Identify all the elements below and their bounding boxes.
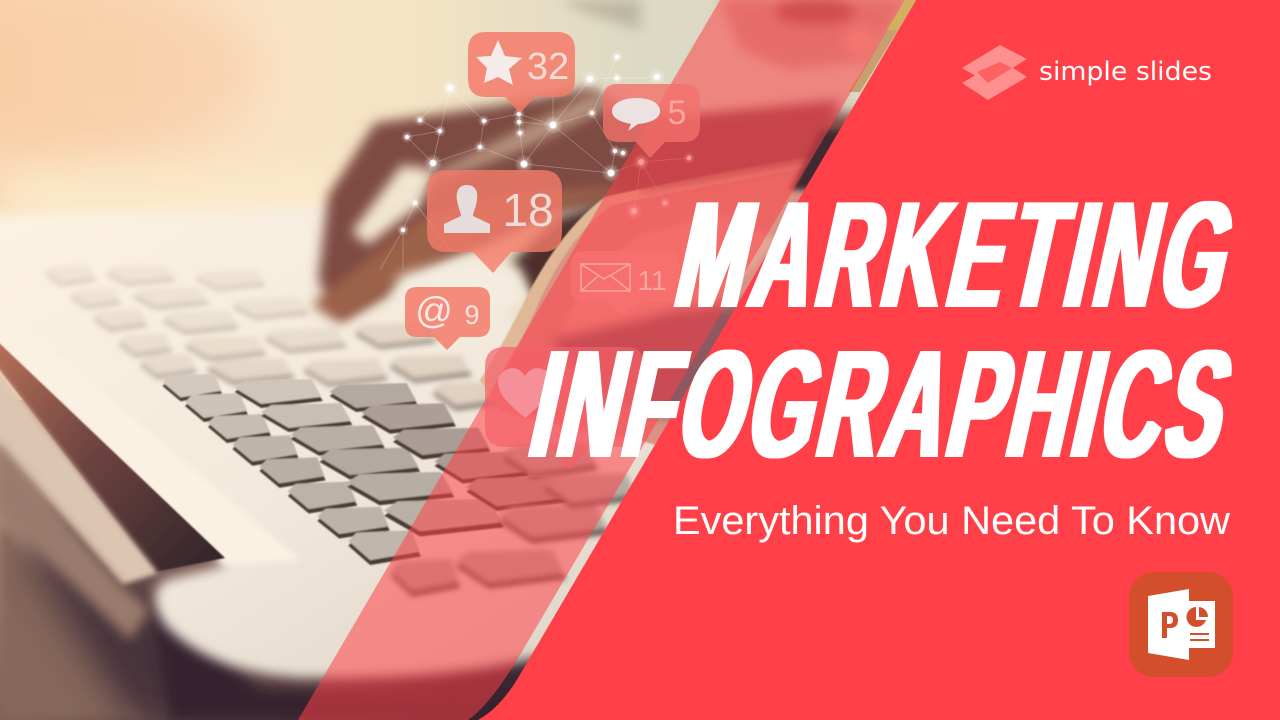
notification bubble: comment 5: 5 [668, 94, 686, 132]
notification bubble: user 18 [427, 170, 562, 273]
notification bubble: mail 11 [571, 251, 679, 315]
sparkle network [380, 51, 695, 270]
title line: marketing: MARKETING [664, 170, 1248, 340]
keyboard sharp keys [163, 374, 567, 565]
subtitle: Everything You Need To Know [673, 499, 1230, 543]
title: marketing infographics [518, 170, 1248, 490]
solid red diagonal panel [478, 0, 1280, 720]
wood desk [0, 400, 560, 720]
logo wordmark: simple slides [1039, 57, 1212, 87]
keyboard blurred rows [45, 265, 508, 410]
hands [311, 0, 905, 500]
notification bubble: user 18: 18 [502, 184, 554, 236]
notification bubble: star 32 [468, 32, 575, 113]
hinge slot [0, 339, 225, 572]
lighter finger gaps [430, 95, 620, 180]
lower hand fingers [480, 155, 830, 460]
laptop front edge [0, 366, 158, 585]
notification bubble: star 32: 32 [527, 46, 569, 88]
title line: infographics: INFOGRAPHICS [518, 318, 1246, 490]
translucent red diagonal band [298, 0, 905, 720]
notification bubble: at 9 [405, 287, 490, 350]
icon: PowerPoint [1129, 572, 1233, 677]
notification bubble: mail 11: 11 [637, 265, 667, 296]
gold stripe at the top of the diagonal [887, 0, 916, 30]
logo: simple slides [962, 45, 1212, 100]
notification bubble: at 9: @ [415, 290, 453, 331]
tan lower finger [311, 187, 615, 322]
laptop body [0, 205, 720, 678]
notification bubble: heart [485, 347, 645, 470]
notification bubble: comment 5 [603, 84, 700, 158]
notification bubble: at 9: 9 [464, 300, 480, 330]
upper hand [318, 88, 900, 320]
logo icon [962, 45, 1027, 100]
